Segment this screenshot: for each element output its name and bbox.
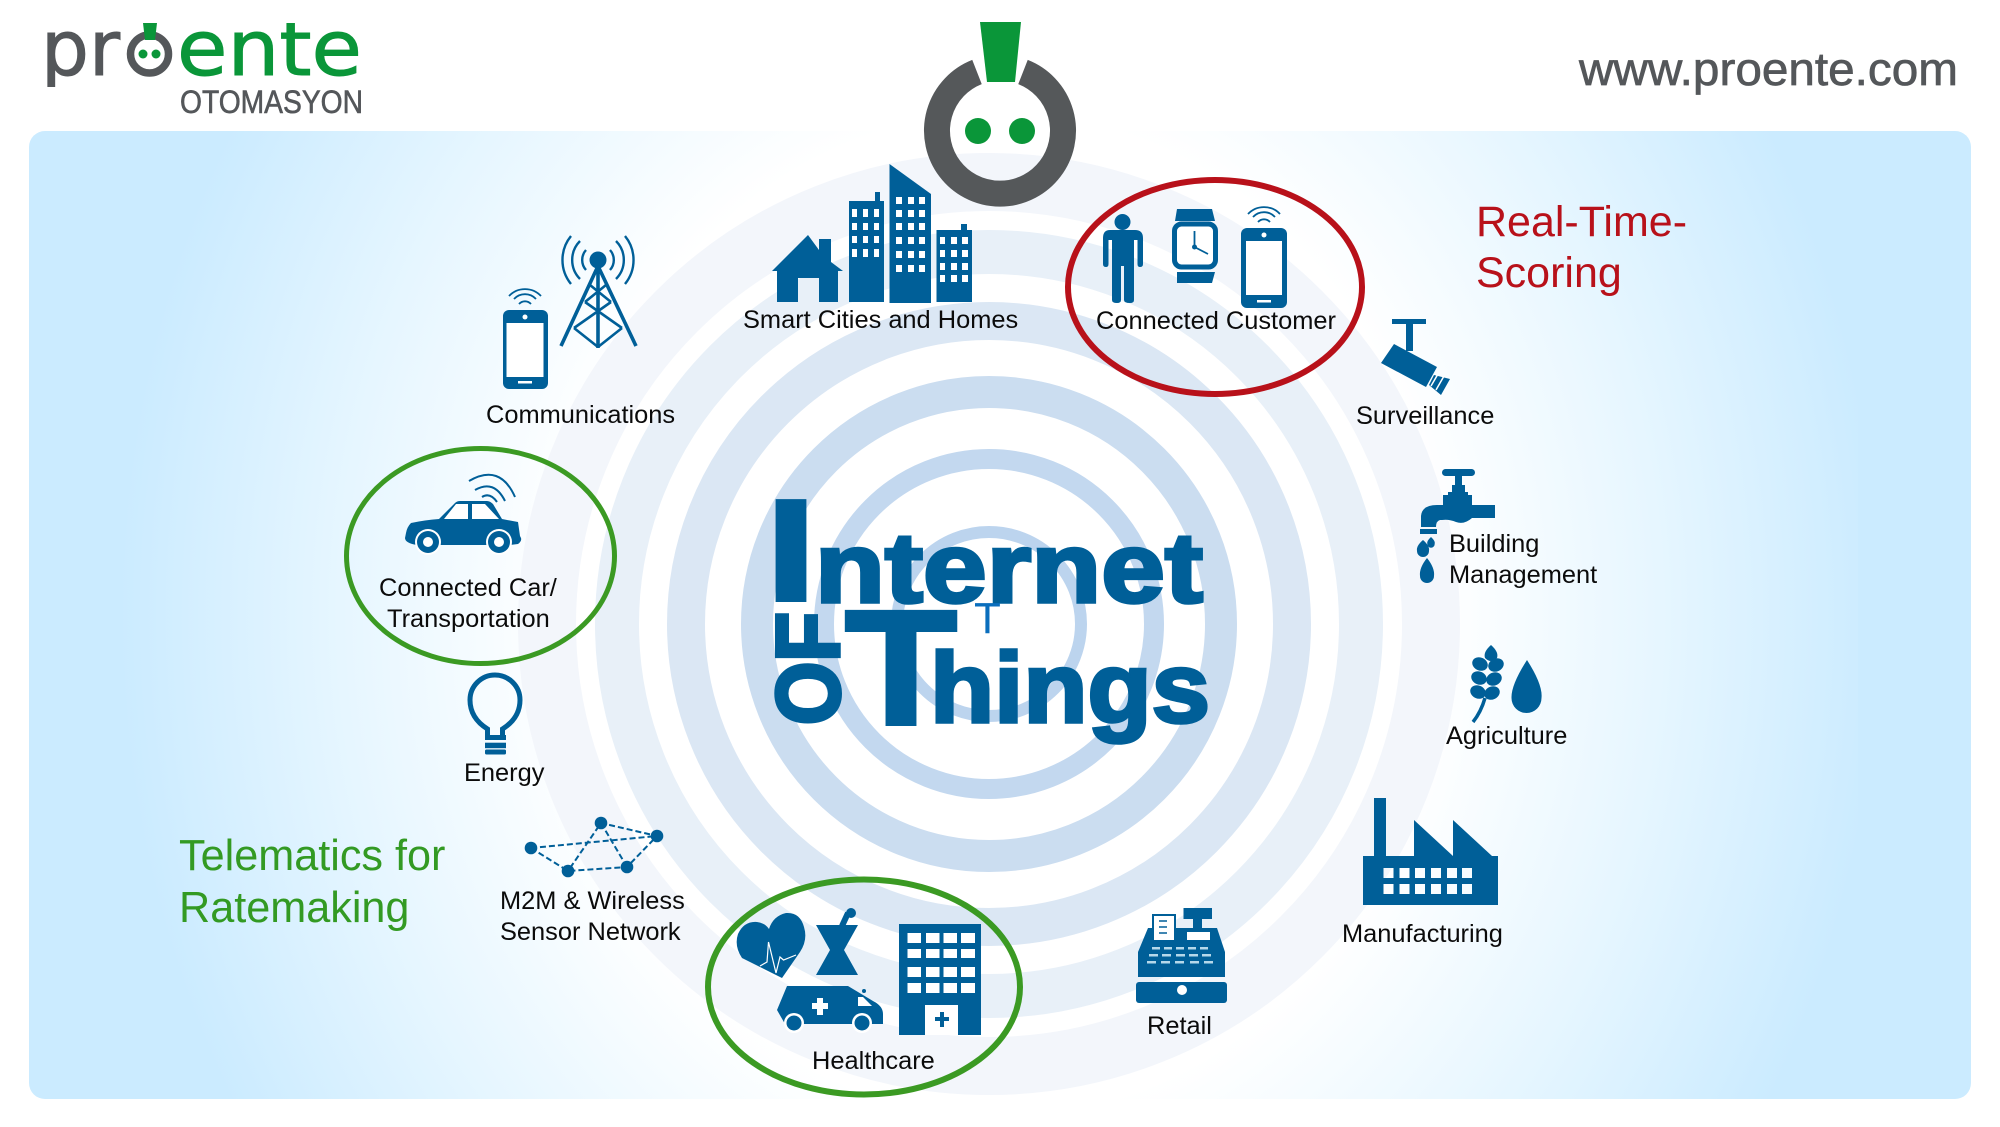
item: Building Management xyxy=(1417,469,1597,589)
icon: security camera xyxy=(1381,319,1450,395)
label: Connected Customer xyxy=(1096,307,1336,335)
item: Retail xyxy=(1136,908,1227,1040)
label: Management xyxy=(1449,561,1597,589)
icon: sensor network xyxy=(525,817,663,877)
icon: connected car xyxy=(405,475,521,555)
icon: smart watch xyxy=(1174,209,1216,283)
item: Communications xyxy=(486,236,675,429)
logo: proente otomasyon: ente xyxy=(177,5,362,94)
label: Sensor Network xyxy=(500,918,681,946)
heading: Real-Time-Scoring xyxy=(1476,198,1687,297)
title: Internet of Things: I xyxy=(763,468,819,633)
logo: proente otomasyon: OTOMASYON xyxy=(180,84,363,120)
item: Agriculture xyxy=(1446,645,1567,750)
label: Agriculture xyxy=(1446,722,1567,750)
icon: ambulance xyxy=(777,986,883,1033)
heading: Telematics for Ratemaking: Ratemaking xyxy=(179,884,409,932)
label xyxy=(500,887,685,946)
logo: proente otomasyon: pr xyxy=(41,5,120,94)
item: Manufacturing xyxy=(1342,798,1503,948)
icon: big proente logo mark xyxy=(937,22,1063,194)
title: Internet of Things: T xyxy=(845,576,957,759)
icon: wheat and water drop xyxy=(1468,645,1542,722)
item: M2M and Wireless Sensor Network xyxy=(500,817,685,946)
label: Surveillance xyxy=(1356,402,1494,430)
label: Smart Cities and Homes xyxy=(743,306,1018,334)
logo: proente otomasyon xyxy=(47,23,361,114)
concentric signal rings xyxy=(547,182,1431,1066)
website address: www.proente.com xyxy=(1578,43,1958,95)
icon: factory xyxy=(1363,798,1498,905)
item: Surveillance xyxy=(1356,319,1494,430)
heading: Real-Time-Scoring: Real-Time- xyxy=(1476,198,1687,246)
icon: cash register xyxy=(1136,908,1227,1003)
label xyxy=(1449,530,1597,589)
icon: water tap xyxy=(1417,469,1495,583)
item: Connected Customer xyxy=(1068,180,1362,394)
title: Internet of Things: T xyxy=(974,594,1001,643)
label: Communications xyxy=(486,401,675,429)
label: Manufacturing xyxy=(1342,920,1503,948)
label: Transportation xyxy=(387,605,550,633)
icon: phone with wifi xyxy=(1241,207,1287,308)
item: Energy xyxy=(464,675,545,787)
icon: light bulb xyxy=(470,675,520,754)
icon: hospital building xyxy=(899,924,981,1035)
label: Energy xyxy=(464,759,545,787)
item: Healthcare xyxy=(708,880,1020,1094)
label: M2M & Wireless xyxy=(500,887,685,915)
heading: Telematics for Ratemaking: Telematics for xyxy=(179,832,445,880)
icon: person xyxy=(1103,214,1143,303)
icon: heart with pulse xyxy=(737,913,805,978)
title: Internet of Things: hings xyxy=(930,632,1210,743)
title: Internet of Things xyxy=(759,468,1210,759)
title: Internet of Things: OF xyxy=(759,612,859,725)
red highlight ellipse xyxy=(1068,180,1362,394)
item: Smart Cities and Homes xyxy=(743,164,1018,334)
label: Building xyxy=(1449,530,1539,558)
label: Retail xyxy=(1147,1012,1212,1040)
icon: phone and tower xyxy=(503,236,636,389)
title: Internet of Things: nternet xyxy=(815,512,1203,623)
icon: house and buildings xyxy=(772,164,972,303)
item: Connected Car / Transportation xyxy=(346,448,614,664)
label: Connected Car/ xyxy=(379,574,558,602)
heading: Real-Time-Scoring: Scoring xyxy=(1476,249,1622,297)
label: Healthcare xyxy=(812,1047,935,1075)
green highlight ellipse xyxy=(346,448,614,664)
heading: Telematics for Ratemaking xyxy=(179,832,445,932)
icon: mortar and pestle xyxy=(816,908,858,975)
green highlight ellipse xyxy=(708,880,1020,1094)
label xyxy=(379,574,558,633)
